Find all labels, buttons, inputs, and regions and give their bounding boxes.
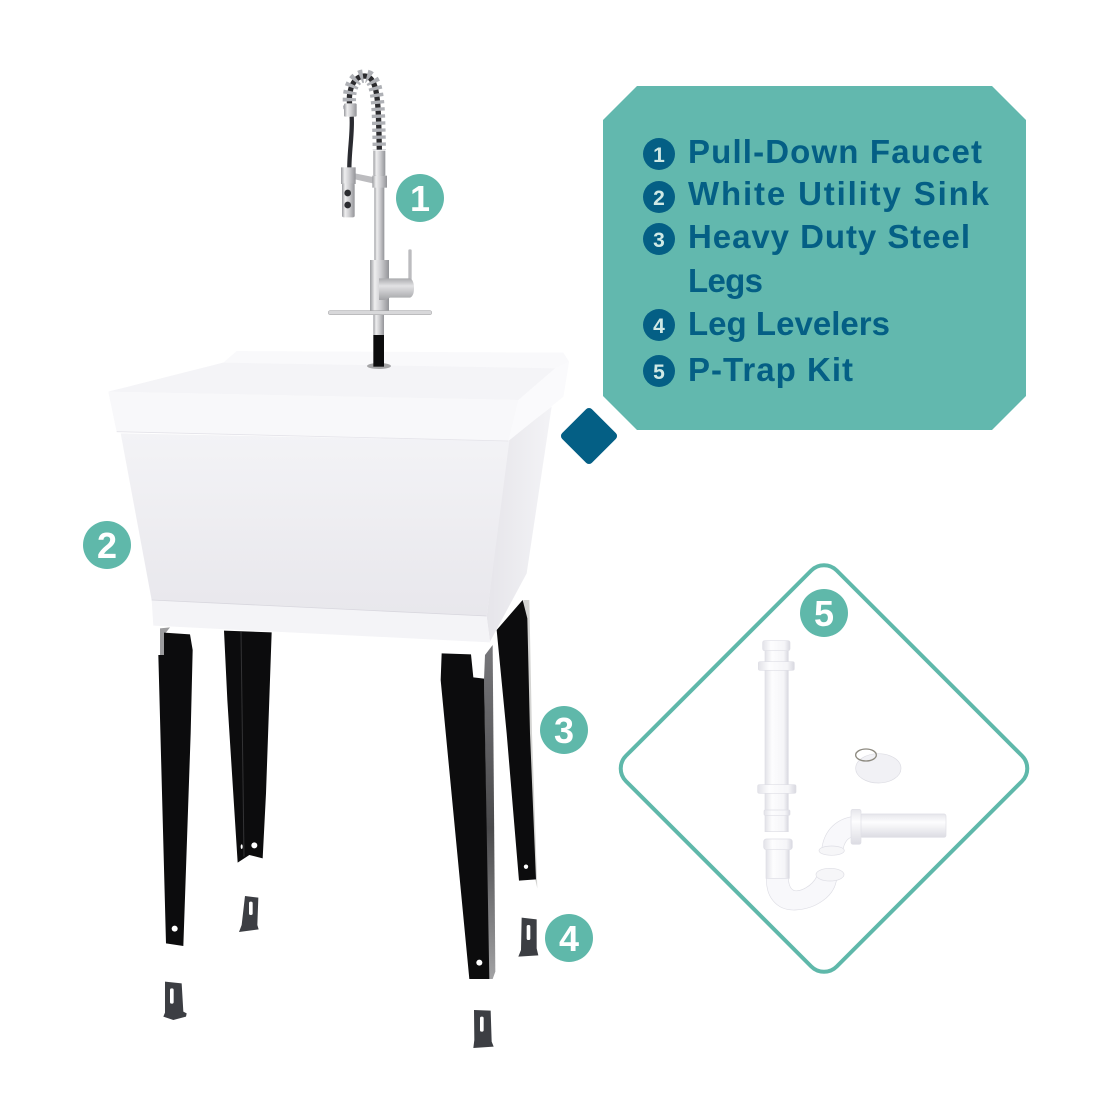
sink top rim and basin <box>108 351 569 441</box>
panel: P-trap diamond outline <box>613 558 1035 979</box>
list item 3: Heavy Duty Steel Legs: 3 <box>653 229 665 252</box>
icon: blue diamond accent <box>559 406 619 466</box>
tailpiece pipe <box>758 641 796 832</box>
white utility sink <box>108 351 569 642</box>
faucet base cylinder <box>370 260 389 311</box>
P-trap kit parts <box>758 641 946 910</box>
badge 3: 3 <box>554 710 574 751</box>
faucet deck plate <box>328 311 432 315</box>
faucet pole <box>374 175 384 262</box>
badge 4 <box>545 914 593 962</box>
leg: front left <box>158 627 193 946</box>
badge 5 <box>800 589 848 637</box>
badge 4: 4 <box>559 918 579 959</box>
badge 2: 2 <box>97 525 117 566</box>
leg leveler: back left <box>239 896 259 932</box>
list item 1: Pull-Down Faucet: Pull-Down Faucet <box>688 133 982 170</box>
faucet spray head <box>341 167 356 217</box>
badge 5: 5 <box>814 593 834 634</box>
faucet hose collar <box>344 103 357 117</box>
legs <box>158 600 538 1048</box>
faucet handle <box>379 249 414 300</box>
list item 2: White Utility Sink: White Utility Sink <box>688 175 990 212</box>
leg: front right <box>441 645 495 979</box>
list item 5: P-Trap Kit: 5 <box>653 361 665 384</box>
faucet spring and hose <box>349 76 379 168</box>
faucet drain tail and flange <box>367 315 391 369</box>
faucet <box>328 76 432 369</box>
P-trap elbow with arm <box>819 809 946 855</box>
list item 3: Heavy Duty Steel Legs: Legs <box>688 262 763 299</box>
sink bottom band <box>152 600 490 642</box>
leg leveler: back right <box>518 918 538 957</box>
list item 5: P-Trap Kit: P-Trap Kit <box>688 351 853 388</box>
list item 3: Heavy Duty Steel Legs <box>643 218 970 299</box>
badge 2 <box>83 521 131 569</box>
panel: parts list <box>603 86 1026 430</box>
sink right side face <box>487 407 552 642</box>
faucet spring sleeve <box>373 151 385 176</box>
badge 3 <box>540 706 588 754</box>
leg leveler: front right <box>473 1010 494 1048</box>
drain stopper with ring <box>856 749 901 783</box>
badge 1: 1 <box>410 178 430 219</box>
J-bend trap <box>764 839 844 910</box>
sink front body <box>121 433 509 617</box>
faucet pole collar <box>372 176 387 188</box>
leg: back right <box>497 600 537 888</box>
faucet arm <box>355 173 380 185</box>
list item 2: White Utility Sink: 2 <box>653 187 665 210</box>
list item 3: Heavy Duty Steel Legs: Heavy Duty Steel <box>688 218 970 255</box>
leg: back left <box>224 631 272 863</box>
badge 1 <box>396 174 444 222</box>
list item 4: Leg Levelers: 4 <box>653 315 665 338</box>
list item 4: Leg Levelers: Leg Levelers <box>688 305 890 342</box>
list item 1: Pull-Down Faucet: 1 <box>653 144 665 167</box>
leg leveler: front left <box>163 982 187 1020</box>
